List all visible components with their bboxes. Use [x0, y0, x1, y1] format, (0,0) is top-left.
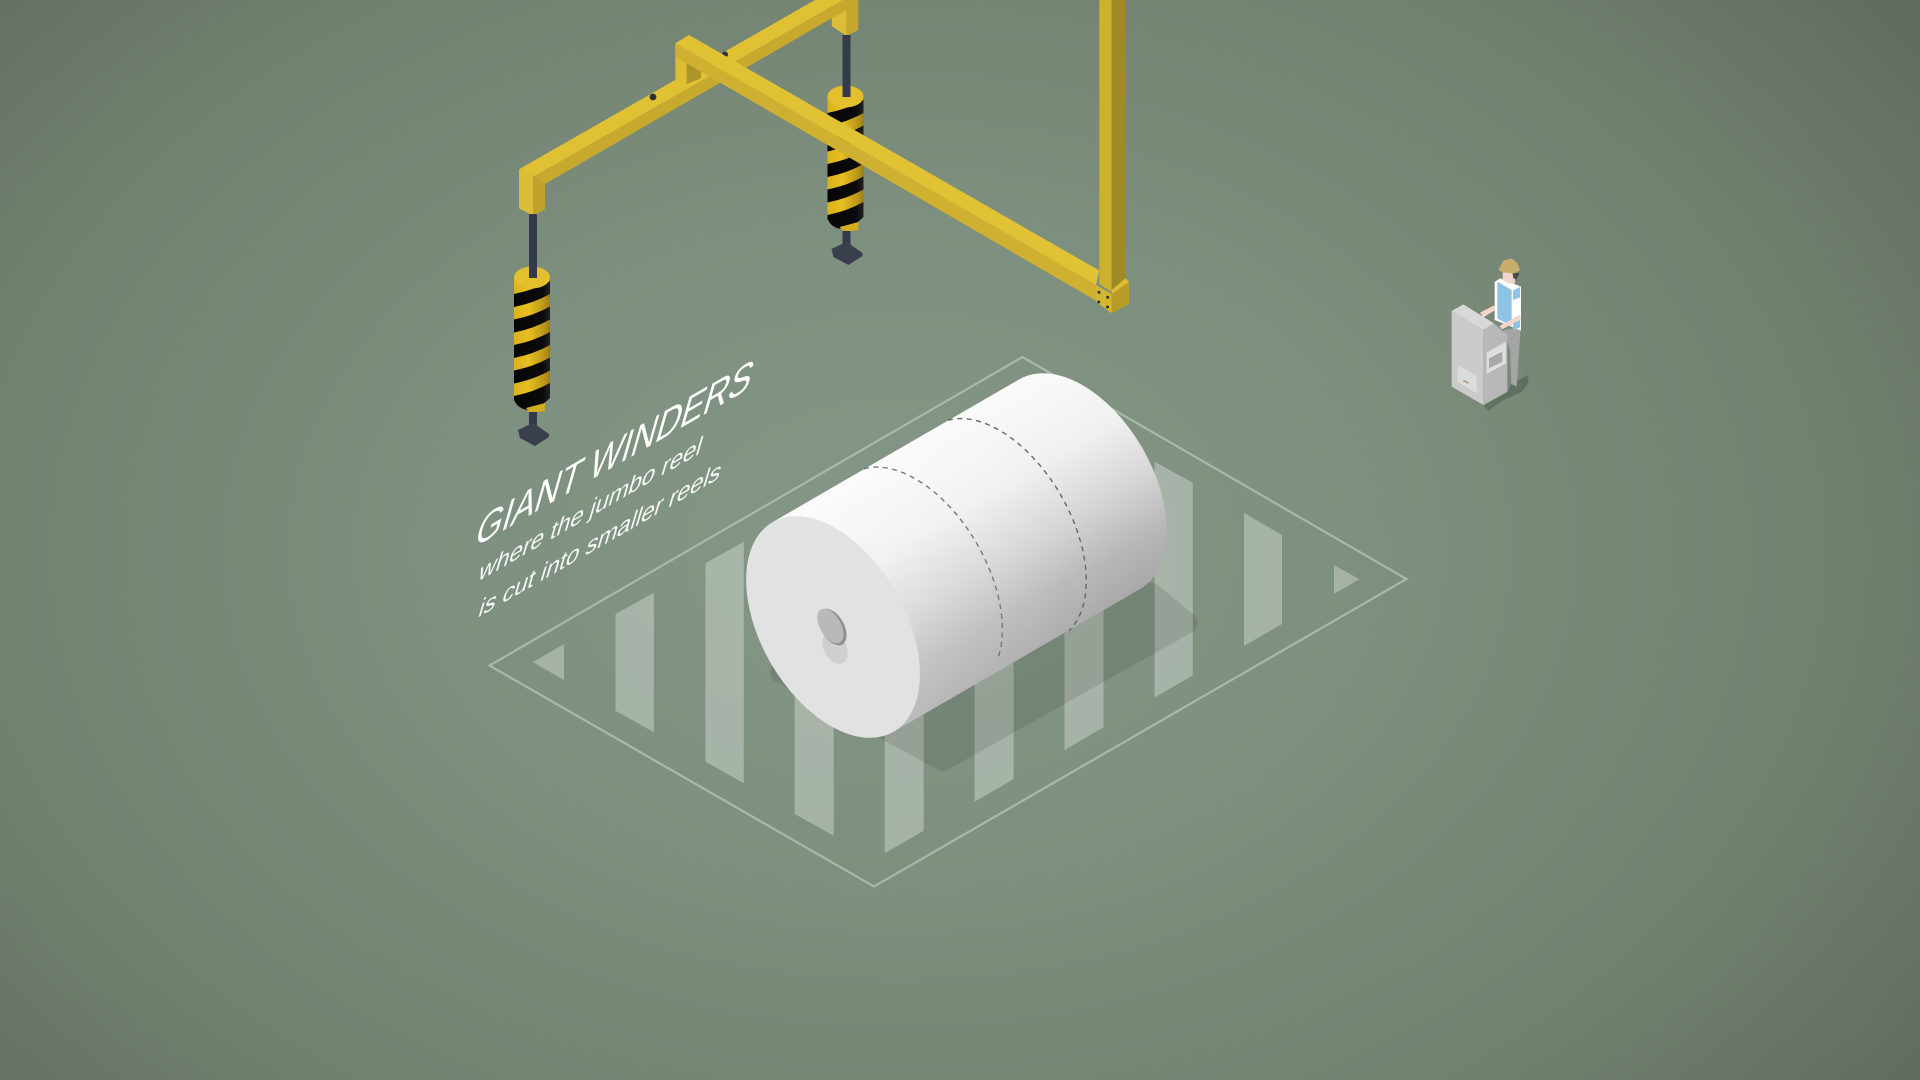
upper arm frame: [519, 0, 858, 216]
body front highlight: [772, 373, 1167, 732]
cabinet top: [1452, 304, 1494, 330]
striped winder left: [514, 214, 550, 446]
hazard stripes: [514, 281, 550, 410]
piston rod: [529, 214, 537, 278]
crossbar top face: [675, 35, 1099, 285]
subtitle line one: where the jumbo reel: [474, 430, 707, 588]
bracket left face: [1096, 285, 1112, 313]
leg inner shadow: [687, 63, 701, 84]
second bolt: [722, 52, 728, 58]
bracket bolts: [1097, 291, 1109, 308]
piston rod: [842, 35, 850, 97]
title text: [470, 348, 760, 624]
torso: [1495, 278, 1521, 331]
bracket right face: [1112, 282, 1129, 313]
arm left hanger block: [519, 169, 533, 216]
striped winder right: [828, 35, 864, 265]
blue vest: [1497, 282, 1512, 326]
cabinet label: [1458, 365, 1477, 393]
neck: [526, 403, 545, 413]
floor diamond outline: [490, 357, 1406, 886]
forearms: [1480, 305, 1495, 317]
hat: [1498, 258, 1520, 273]
cylinder body: [514, 277, 550, 410]
roll body: [772, 373, 1167, 732]
dashed cut line one: [864, 467, 1002, 658]
cylinder top: [828, 86, 864, 108]
dashed cut line two: [948, 419, 1086, 631]
floor stripes: [533, 460, 1360, 853]
hub: [813, 604, 852, 650]
cylinder body: [828, 96, 864, 229]
hazard stripes: [828, 100, 864, 229]
panel screen: [1489, 352, 1502, 368]
arm bolt: [650, 94, 656, 100]
subtitle line two: is cut into smaller reels: [475, 455, 726, 624]
arm side face: [533, 0, 847, 184]
vertical post right face: [1112, 0, 1126, 292]
head: [1503, 271, 1515, 283]
roll shadow: [780, 560, 1188, 761]
cabinet right face: [1483, 323, 1507, 405]
arm top face: [519, 0, 843, 177]
arm right hanger block: [832, 10, 847, 36]
ground shadow: [1483, 375, 1529, 411]
diagonal crossbar and post: [675, 0, 1129, 313]
cabinet panel: [1487, 342, 1506, 374]
vertical post left face: [1099, 0, 1112, 292]
hub shadow: [817, 628, 853, 668]
heading: GIANT WINDERS: [470, 348, 760, 558]
crossbar leg: [675, 43, 687, 84]
foot: [518, 423, 549, 446]
cylinder top: [514, 266, 550, 288]
operator at control cabinet: [1452, 258, 1529, 411]
neck: [840, 222, 858, 232]
jumbo paper roll: [710, 373, 1167, 768]
roll end face: [710, 486, 956, 768]
cabinet left face: [1452, 311, 1483, 405]
bracket lip: [1112, 278, 1129, 294]
legs: [1503, 327, 1521, 387]
crossbar side face: [675, 43, 1097, 301]
foot: [832, 242, 862, 265]
